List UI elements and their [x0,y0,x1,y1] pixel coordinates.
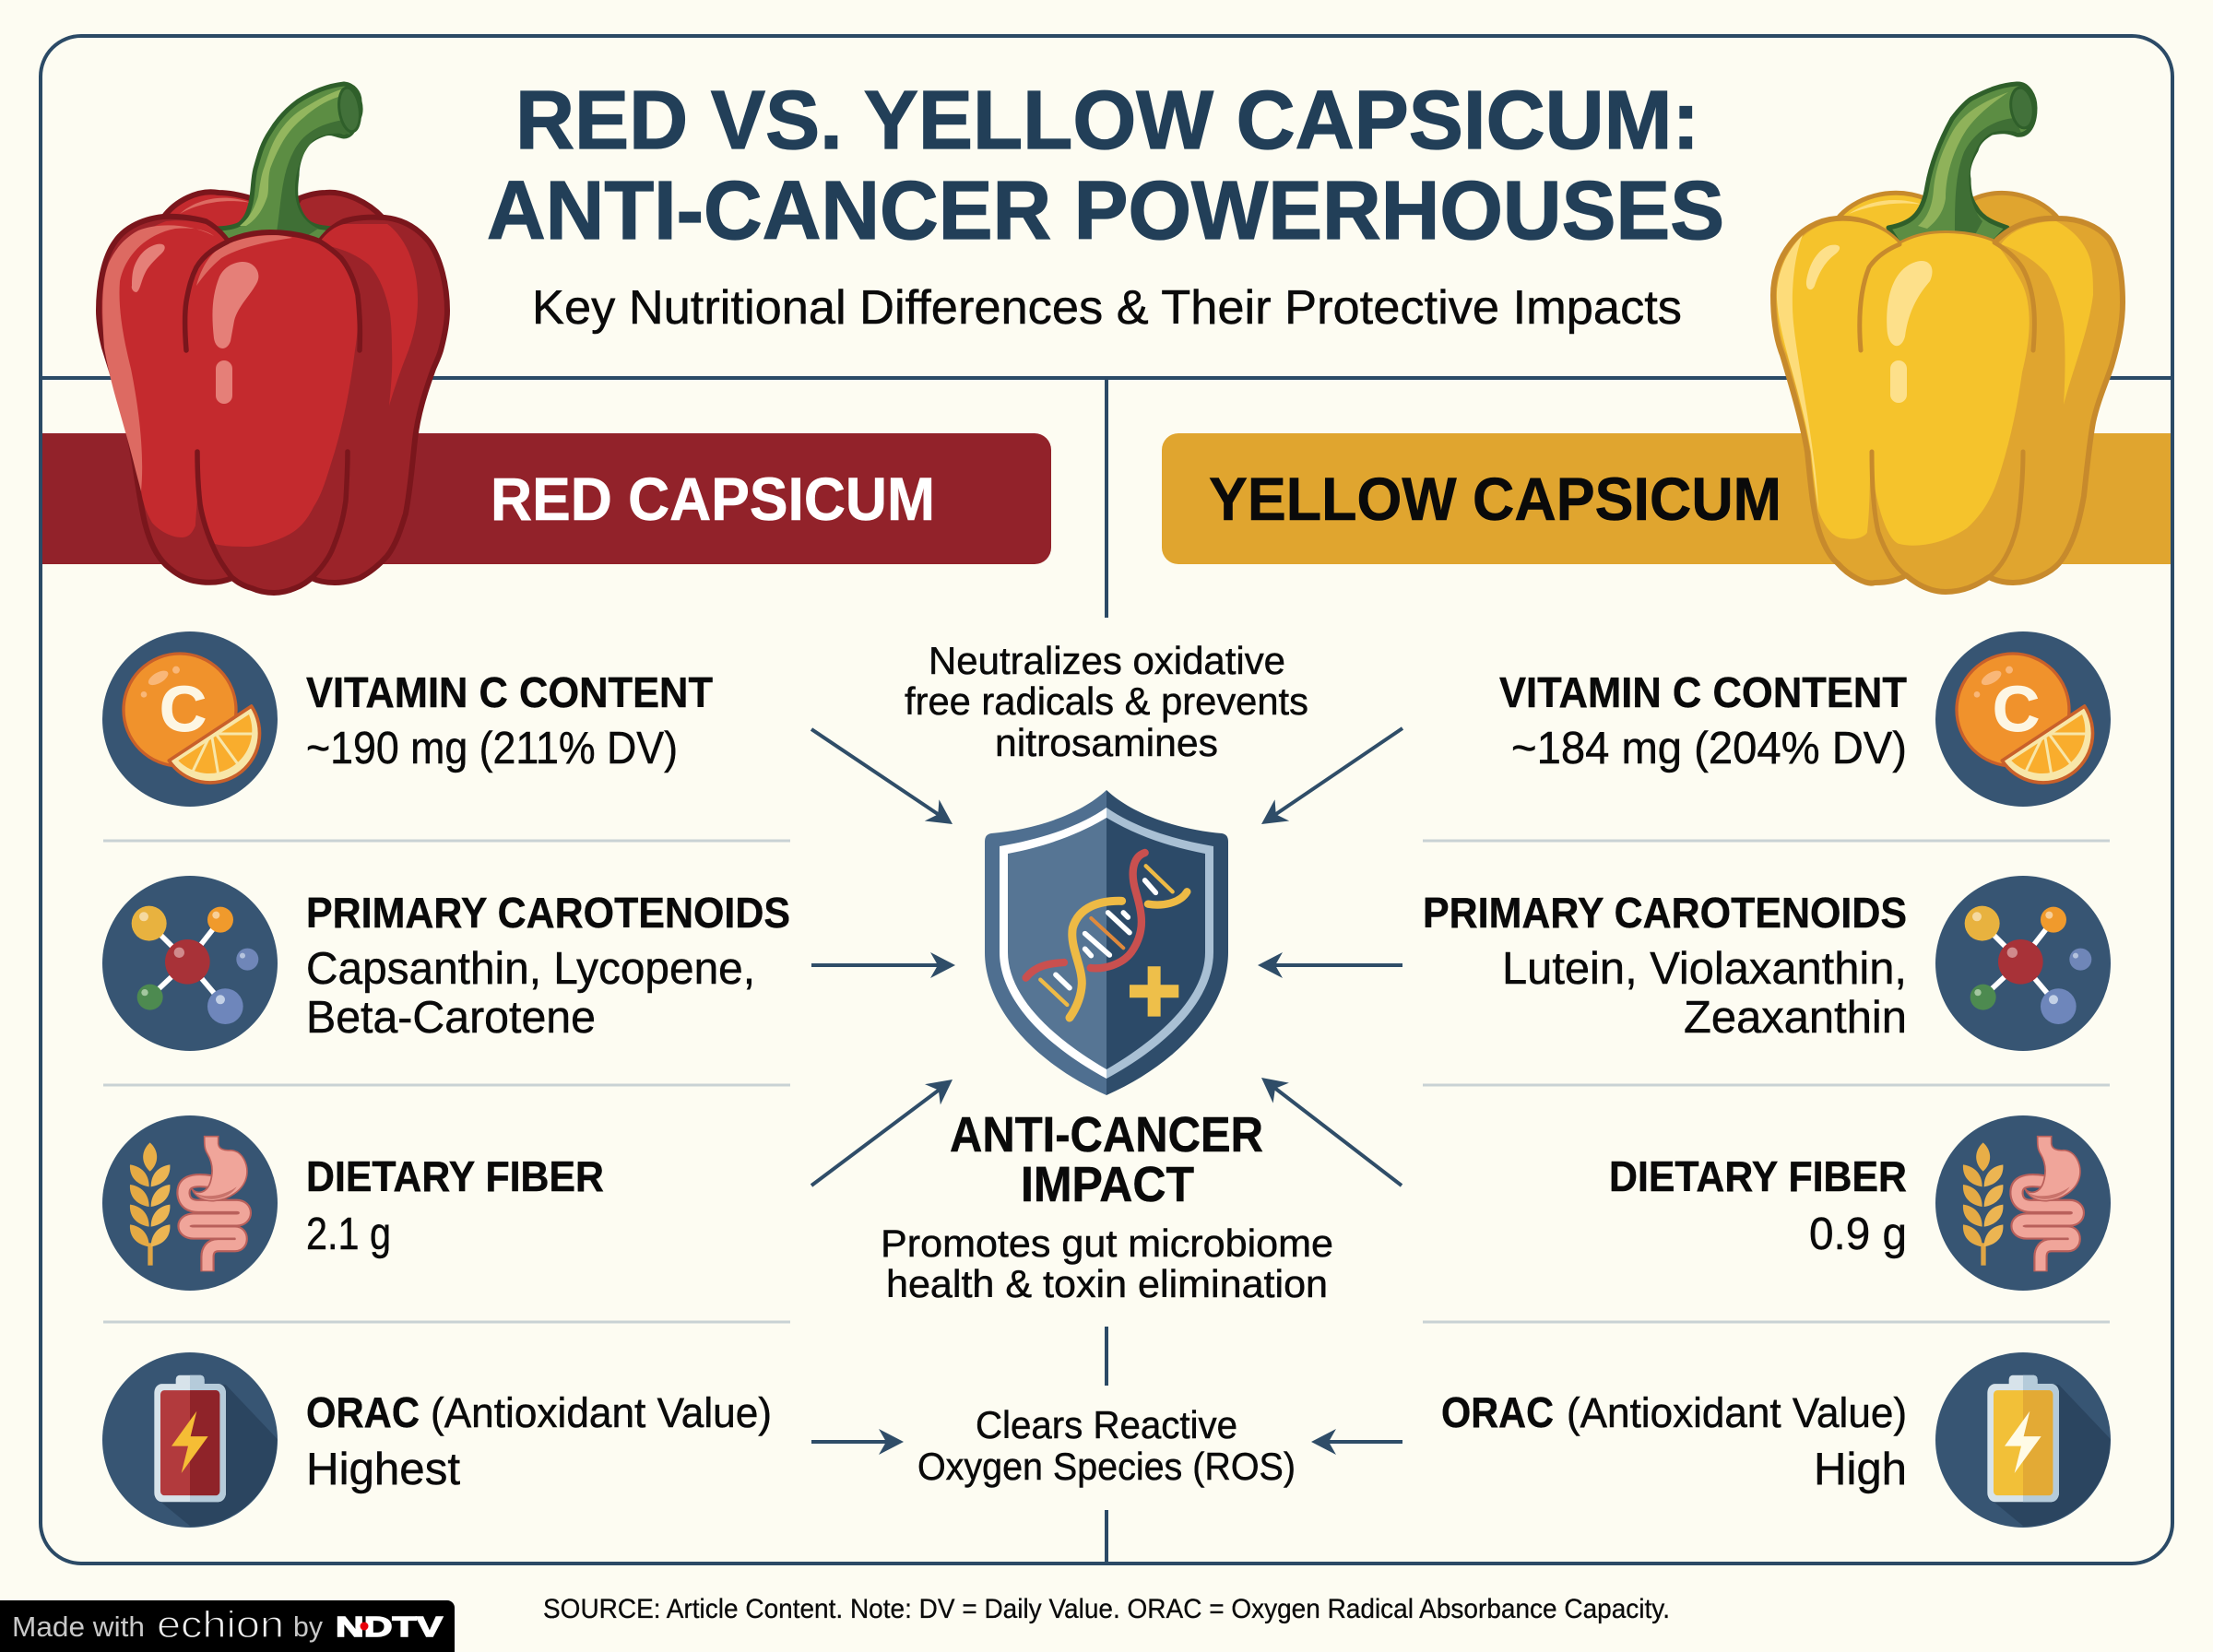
icon: carotenoid molecule [102,876,278,1051]
vitamin C text right: ~184 mg (204% DV) [1511,724,1907,773]
ORAC text: ORAC [306,1388,420,1436]
icon: vitamin C orange: C [160,673,207,745]
carotenoids text [306,889,790,1043]
ORAC text [306,1388,772,1494]
gut microbiome text [881,1221,1333,1305]
title [487,75,1724,257]
carotenoids text: PRIMARY CAROTENOIDS [306,889,790,937]
oxidative radicals text [905,639,1308,764]
icon: carotenoid molecule right [1935,876,2111,1051]
anti-cancer impact heading: IMPACT [1021,1157,1194,1212]
vitamin C text: VITAMIN C CONTENT [306,668,713,716]
subtitle: Key Nutritional Differences & Their Protective Impacts [532,281,1682,335]
ORAC text right: ORAC [1441,1388,1554,1436]
panel: red capsicum banner: RED CAPSICUM [491,465,935,533]
arrow: red fiber to shield [811,1069,960,1186]
vitamin C text: ~190 mg (211% DV) [306,724,678,773]
source note: SOURCE: Article Content. Note: DV = Daily Value. ORAC = Oxygen Radical Absorbance Capacity. [543,1594,1670,1624]
vitamin C text right: VITAMIN C CONTENT [1499,668,1907,716]
panel: red column rows [102,631,790,1528]
watermark badge: Made with [12,1611,145,1643]
anti-cancer impact heading: ANTI-CANCER [950,1107,1263,1162]
dietary fiber text right: DIETARY FIBER [1609,1152,1907,1200]
icon: shield with DNA [985,790,1228,1095]
anti-cancer impact heading [950,1107,1263,1212]
carotenoids text right: PRIMARY CAROTENOIDS [1423,889,1907,937]
panel: yellow column rows [1423,631,2111,1528]
panel: yellow capsicum banner: YELLOW CAPSICUM [1209,465,1781,533]
ORAC text right: High [1814,1445,1907,1494]
ORAC text right: (Antioxidant Value) [1567,1389,1907,1436]
ORAC text: Highest [306,1445,460,1494]
ORAC text: (Antioxidant Value) [431,1389,772,1436]
watermark badge [0,1600,455,1652]
panel: yellow capsicum banner [1162,433,2171,564]
arrow: red vitamin C to shield [811,729,960,835]
icon: red pepper [99,84,447,593]
arrow: yellow carotenoids to shield [1258,952,1402,978]
ORAC text right [1441,1388,1907,1494]
icon: red battery [102,1352,278,1528]
icon: wheat and gut right [1935,1115,2111,1291]
icon: vitamin C orange [102,631,278,807]
watermark badge: echion [157,1603,284,1646]
oxidative radicals text: nitrosamines [995,721,1218,764]
oxidative radicals text: free radicals & prevents [905,679,1308,723]
gut microbiome text: Promotes gut microbiome [881,1221,1333,1265]
arrow: yellow fiber to shield [1253,1068,1402,1186]
icon: yellow pepper [1773,84,2123,592]
oxidative radicals text: Neutralizes oxidative [929,639,1285,682]
dietary fiber text right: 0.9 g [1809,1210,1907,1259]
carotenoids text: Capsanthin, Lycopene, [306,944,755,994]
vitamin C text right [1499,668,1907,773]
carotenoids text right [1423,889,1907,1043]
icon: vitamin C orange right [1935,631,2111,807]
title: ANTI-CANCER POWERHOUSES [487,165,1724,257]
arrow: yellow ORAC to ROS [1311,1429,1402,1455]
gut microbiome text: health & toxin elimination [886,1262,1328,1305]
panel: red capsicum banner [42,433,1051,564]
watermark badge: by [293,1611,323,1643]
dietary fiber text right [1609,1152,1907,1259]
dietary fiber text: DIETARY FIBER [306,1152,604,1200]
arrow: red ORAC to ROS [811,1429,904,1455]
vitamin C text [306,668,713,773]
dietary fiber text: 2.1 g [306,1210,391,1259]
reactive oxygen text [917,1403,1296,1488]
title: RED VS. YELLOW CAPSICUM: [515,75,1699,167]
dietary fiber text [306,1152,604,1259]
arrow: red carotenoids to shield [811,952,955,978]
carotenoids text right: Zeaxanthin [1684,993,1907,1043]
carotenoids text: Beta-Carotene [306,993,596,1043]
icon: wheat and gut [102,1115,278,1291]
watermark badge: NDTV [336,1611,443,1643]
panel: central impact column [881,639,1333,1488]
arrow: yellow vitamin C to shield [1254,728,1402,835]
icon: vitamin C orange right: C [1993,673,2040,745]
icon: yellow battery [1935,1352,2111,1528]
reactive oxygen text: Clears Reactive [976,1403,1237,1446]
reactive oxygen text: Oxygen Species (ROS) [917,1445,1296,1488]
carotenoids text right: Lutein, Violaxanthin, [1502,944,1907,994]
